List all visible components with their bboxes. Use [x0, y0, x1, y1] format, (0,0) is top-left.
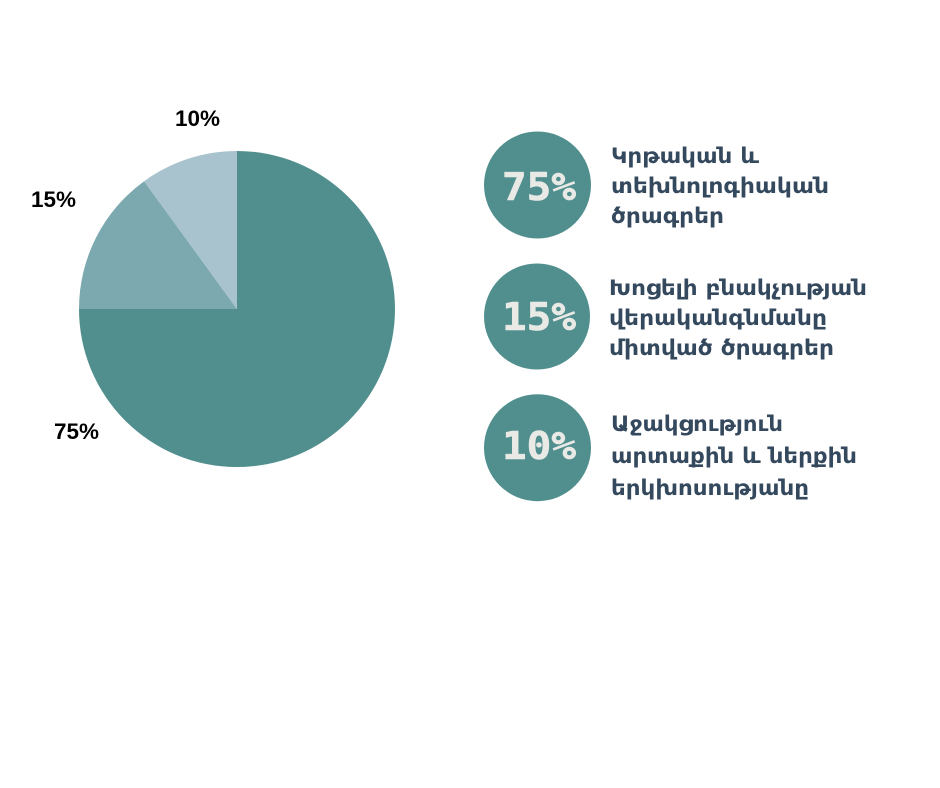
description: արտաքին և ներքին: [611, 444, 857, 468]
badge circle: [484, 264, 590, 370]
slice: 15%: [79, 181, 237, 309]
slice: 75%: [79, 151, 395, 467]
legend item: 75%: [484, 132, 829, 238]
badge value: 15%: [502, 295, 576, 339]
label: 15%: 15%: [31, 187, 76, 212]
description: միտված ծրագրեր: [609, 336, 834, 360]
badge value: 75%: [502, 165, 576, 209]
badge circle: [484, 394, 591, 501]
description: երկխոսությանը: [611, 476, 809, 500]
description: վերականգնմանը: [609, 306, 827, 330]
description: Կրթական և: [611, 144, 759, 168]
legend item: 10%: [484, 394, 857, 501]
label: 75%: 75%: [54, 419, 99, 444]
label: 10%: 10%: [175, 106, 220, 131]
badge circle: [484, 132, 591, 238]
legend item: 15%: [484, 264, 867, 370]
description: Աջակցություն: [611, 412, 783, 436]
description: ծրագրեր: [611, 204, 724, 228]
slice: 10%: [144, 151, 237, 309]
description: Խոցելի բնակչության: [609, 276, 867, 300]
badge value: 10%: [502, 424, 576, 468]
pie labels: [31, 106, 220, 444]
description: տեխնոլոգիական: [611, 174, 829, 198]
pie chart: [79, 151, 395, 467]
